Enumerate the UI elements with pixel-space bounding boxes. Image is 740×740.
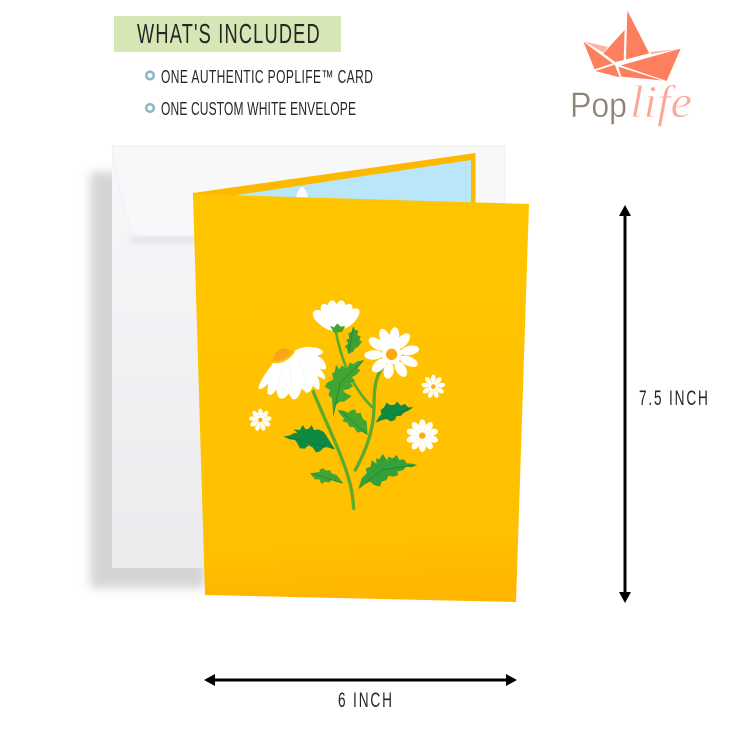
list: included items (146, 68, 373, 120)
flower: top daisy (310, 299, 363, 334)
arrow: height dimension (619, 205, 631, 603)
logo wordmark: life (630, 76, 692, 127)
card inside blue panel (237, 160, 471, 204)
flower: drooping daisy (258, 347, 326, 399)
leaf: small top (345, 326, 362, 354)
stems (313, 332, 383, 508)
heading: what's included (114, 16, 341, 52)
flower: open daisy (364, 327, 420, 379)
label: height: 7.5 INCH (639, 386, 708, 410)
envelope shadow (90, 172, 205, 588)
leaf: left dark (283, 425, 335, 452)
label: width: 6 INCH (338, 688, 392, 712)
envelope (90, 145, 505, 588)
card front (193, 194, 529, 602)
flower: small daisy right (421, 375, 446, 399)
envelope flap (112, 146, 505, 236)
flower: small daisy left (249, 409, 272, 431)
arrow: width dimension (204, 674, 517, 686)
popup peek (296, 187, 308, 198)
logo: poplife (570, 11, 692, 127)
leaf: centre (338, 409, 368, 435)
envelope body (112, 145, 505, 568)
flower: medium daisy right (406, 419, 439, 452)
logo wordmark: Pop (570, 86, 627, 125)
icon: origami boat (583, 11, 681, 81)
bullet: custom envelope: ONE CUSTOM WHITE ENVELOPE (161, 100, 356, 120)
heading: what's included: WHAT'S INCLUDED (137, 19, 320, 50)
leaves (283, 326, 417, 489)
card: greeting card (193, 153, 529, 602)
leaf: bottom left (310, 468, 343, 484)
illustration: daisy bouquet (249, 299, 446, 508)
flap shadow (130, 236, 200, 243)
leaf: right dark (376, 402, 413, 423)
leaf: bottom right (358, 454, 417, 489)
logo wordmark (570, 76, 692, 127)
leaf: upper centre (325, 360, 364, 417)
bullet: authentic card: ONE AUTHENTIC POPLIFE™ CARD (161, 68, 373, 88)
card back panel (193, 153, 476, 206)
